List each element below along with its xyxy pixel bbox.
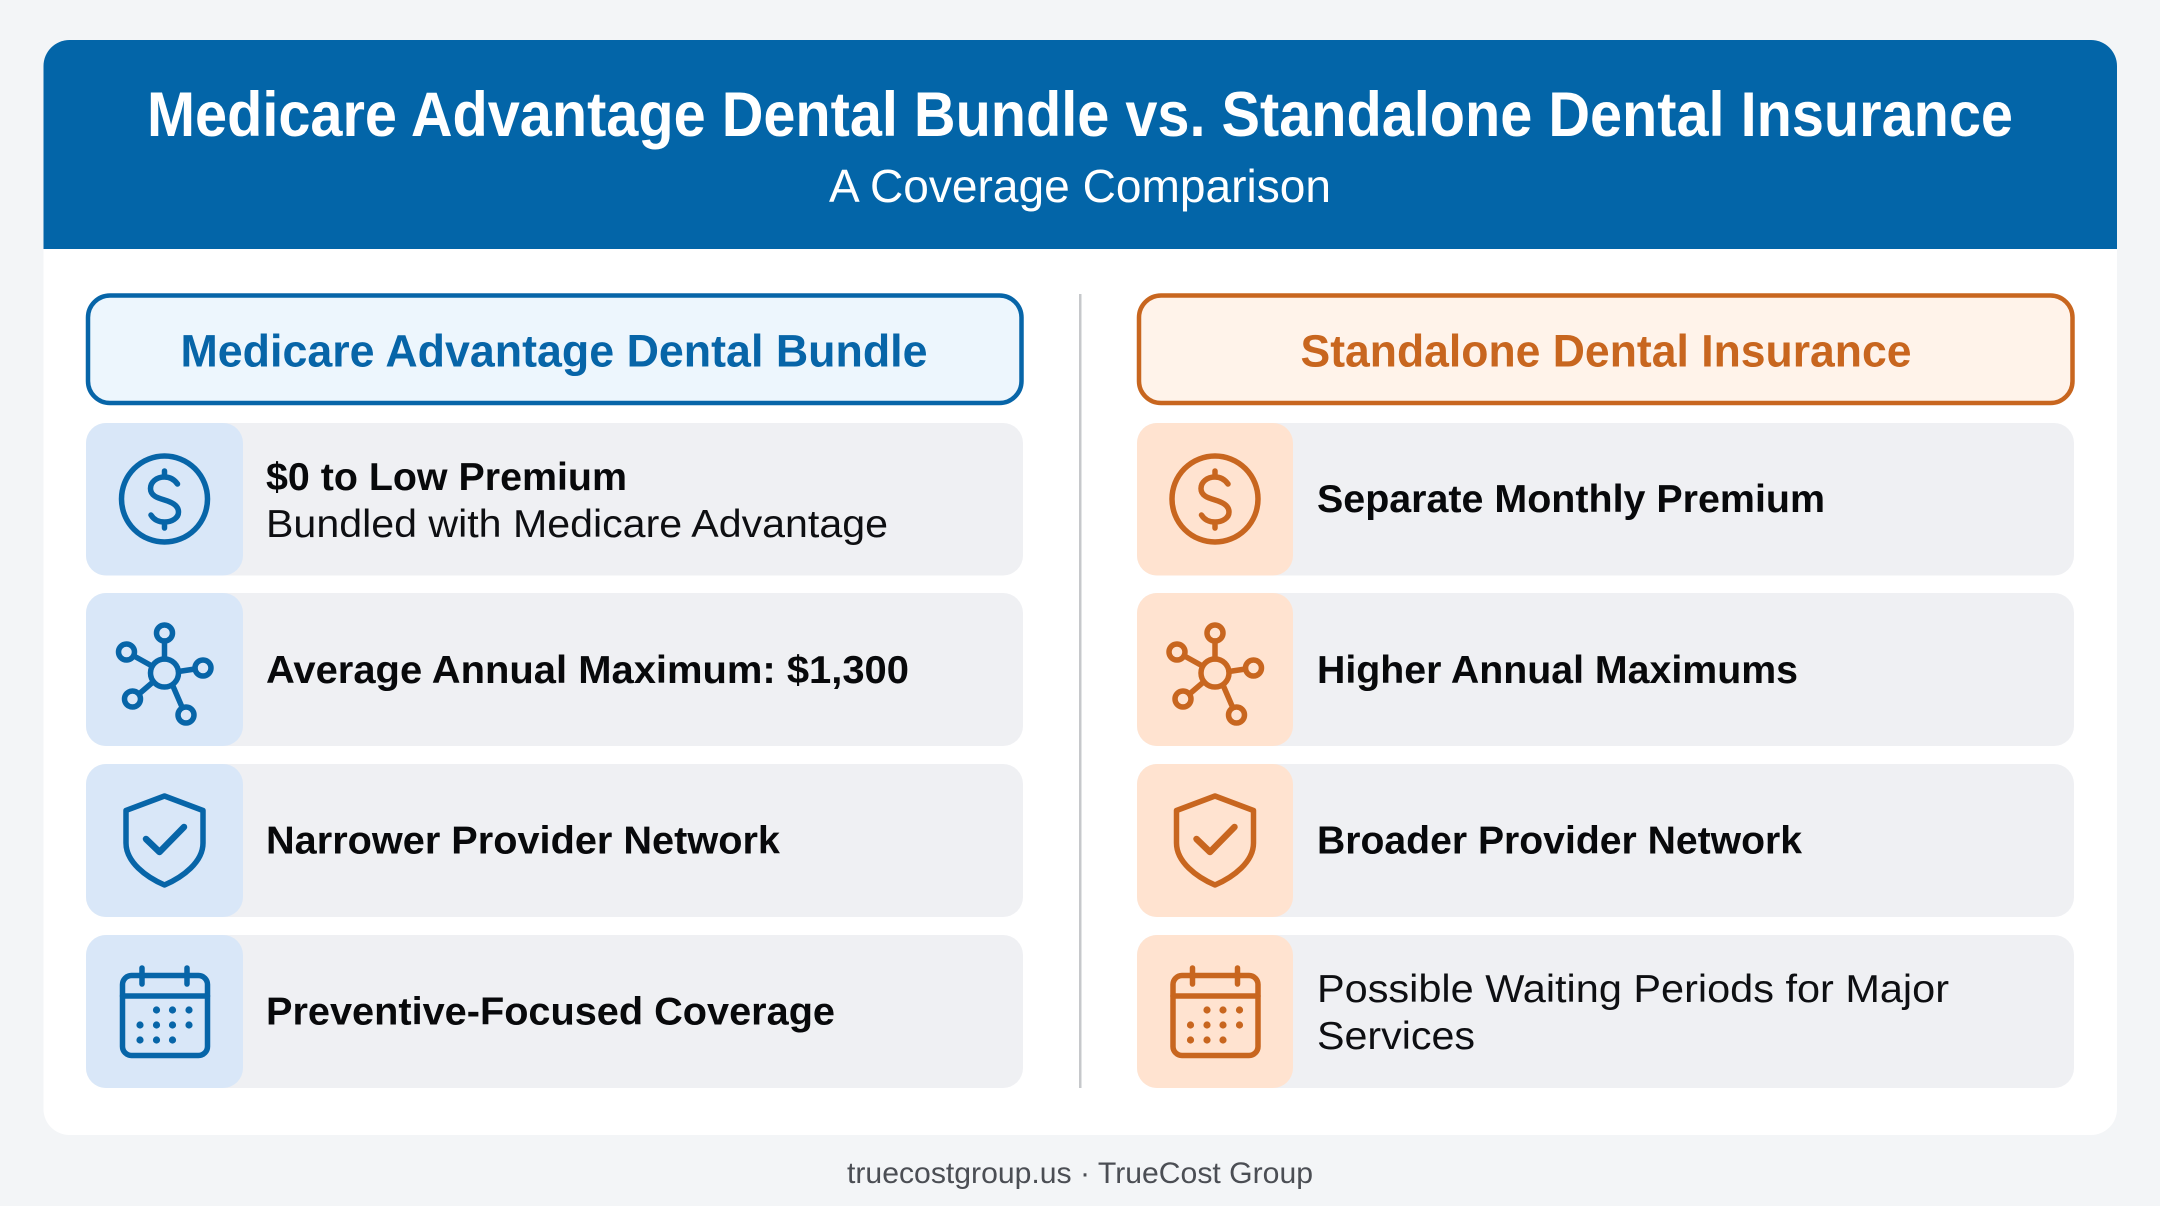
text: annual maximums: Higher Annual Maximums — [1317, 649, 1798, 692]
row: annual maximum — [86, 593, 1023, 746]
icon: dollar — [1137, 423, 1293, 576]
text: premium: Separate Monthly Premium — [1317, 478, 1825, 521]
icon: network — [1137, 593, 1293, 746]
text: premium: Bundled with Medicare Advantage — [266, 503, 888, 546]
icon: shield — [1137, 764, 1293, 917]
subtitle: A Coverage Comparison — [829, 160, 1331, 212]
icon: dollar — [86, 423, 243, 576]
text: coverage: Preventive-Focused Coverage — [266, 990, 835, 1034]
title: Medicare Advantage Dental Bundle vs. Standalone Dental Insurance — [147, 80, 2013, 150]
column heading: Standalone Dental Insurance: Standalone Dental Insurance — [1300, 326, 1912, 376]
text: premium: $0 to Low Premium — [266, 456, 627, 499]
text: waiting periods — [1317, 968, 1949, 1058]
text: annual maximum: Average Annual Maximum: $1,300 — [266, 649, 909, 692]
text: network: Broader Provider Network — [1317, 820, 1802, 862]
column heading: Standalone Dental Insurance — [1139, 296, 2072, 403]
panel: Medicare Advantage Dental Bundle — [86, 296, 1023, 1088]
footer: truecostgroup.us · TrueCost Group — [847, 1157, 1313, 1190]
row: separate premium — [1137, 423, 2074, 576]
text: network: Narrower Provider Network — [266, 820, 780, 862]
text: waiting periods: Services — [1317, 1015, 1475, 1058]
icon: network — [86, 593, 243, 746]
row: provider network — [1137, 764, 2074, 917]
icon: calendar — [86, 935, 243, 1088]
icon: shield — [86, 764, 243, 917]
panel: Standalone Dental Insurance — [1137, 296, 2074, 1088]
header banner — [44, 40, 2117, 249]
row: annual maximums — [1137, 593, 2074, 746]
text: premium — [266, 456, 888, 546]
column heading: Medicare Advantage Dental Bundle — [88, 296, 1022, 403]
center divider — [1079, 294, 1082, 1088]
text: waiting periods: Possible Waiting Periods for Major — [1317, 968, 1949, 1011]
icon: calendar — [1137, 935, 1293, 1088]
row: provider network — [86, 764, 1023, 917]
row: coverage — [86, 935, 1023, 1088]
row: waiting periods — [1137, 935, 2074, 1088]
row: low premium — [86, 423, 1023, 576]
column heading: Medicare Advantage Dental Bundle: Medicare Advantage Dental Bundle — [180, 326, 928, 376]
